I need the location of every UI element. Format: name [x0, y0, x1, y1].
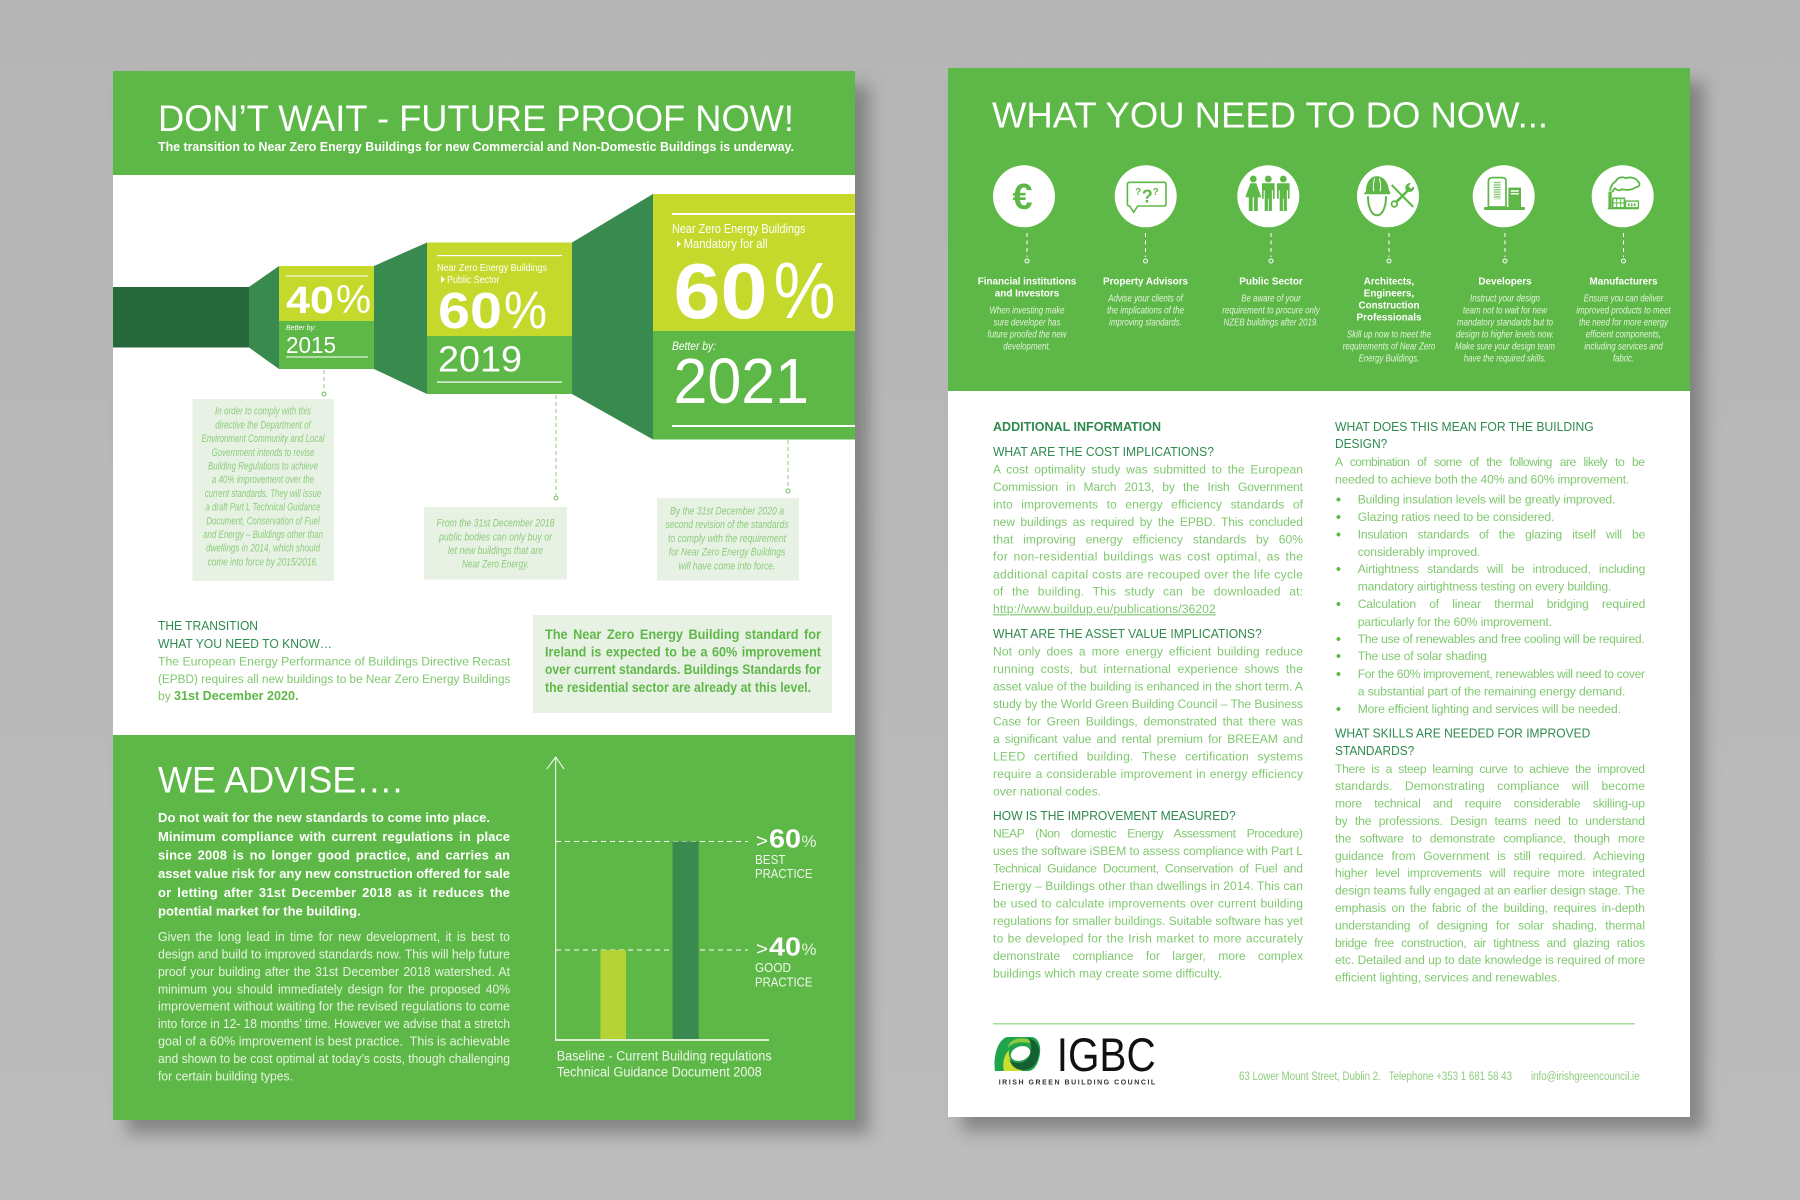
audience: public sector: NZEB buildings after 2019. [1224, 317, 1318, 329]
audience: architects and engineers: requirements of Near Zero [1343, 341, 1435, 353]
stage: 60% mandatory by 2021: Mandatory for all [684, 236, 768, 251]
section: skills: STANDARDS? [1335, 744, 1414, 758]
bullet list: mandatory airtightness testing on every building. [1358, 580, 1611, 594]
heading: we advise: WE ADVISE…. [158, 760, 402, 801]
audience: property advisors [1103, 165, 1188, 329]
section: asset value implications: study by the World Green Building Council – The Business [993, 697, 1303, 711]
section: cost implications: into improvements to energy efficiency standards of [993, 498, 1304, 512]
callout: 2015 note: Document, Conservation of Fuel [206, 515, 320, 527]
bullet list: • [1336, 526, 1341, 542]
stage: 60% mandatory by 2021: 2021 [674, 345, 809, 417]
label: best practice [755, 824, 816, 881]
callout: 2015 note: In order to comply with this [215, 406, 311, 418]
stage: 40% by 2015: Better by: [286, 323, 316, 332]
bullet list: The use of renewables and free cooling will be required. [1358, 632, 1645, 646]
icon: factory [1608, 177, 1639, 209]
section: cost implications: of the building. This study can be downloaded at: [993, 585, 1303, 599]
label: good practice: 40 [769, 932, 801, 962]
audience: manufacturers: the need for more energy [1579, 317, 1669, 329]
section: improvement measurement: buildings which may create some difficulty. [993, 966, 1222, 980]
label: best practice: % [802, 832, 816, 851]
section: cost implications: A cost optimality study was submitted to the European [993, 462, 1303, 476]
text block: bold advice: Do not wait for the new standards to come into place. [158, 810, 490, 825]
stage: 60% public sector by 2019: 60 [438, 282, 502, 339]
text block: the transition: (EPBD) requires all new buildings to be Near Zero Energy Buildings [158, 672, 510, 686]
callout: 2015 note: Government intends to revise [212, 447, 314, 459]
icon: hard hat and tools [1364, 176, 1414, 215]
audience: manufacturers: improved products to meet [1576, 305, 1672, 317]
icon: buildings [1484, 178, 1525, 210]
panel: we advise [113, 735, 855, 1120]
section: skills: design teams fully engaged at an earlier design stage. The [1335, 884, 1645, 898]
bullet list: Calculation of linear thermal bridging required [1358, 597, 1645, 611]
bullet list: Building insulation levels will be greatly improved. [1358, 492, 1615, 506]
audience: public sector: Public Sector [1239, 276, 1303, 287]
contact details: info@irishgreencouncil.ie [1531, 1071, 1640, 1083]
callout: 2021 note [657, 440, 799, 581]
bullet list: Glazing ratios need to be considered. [1358, 510, 1554, 524]
text column: design and skills [1335, 420, 1646, 985]
text block: the transition: by [158, 689, 172, 703]
axis caption: Baseline - Current Building regulations [557, 1049, 772, 1064]
funnel connector 3 [572, 194, 653, 440]
section: asset value implications [993, 627, 1304, 798]
bar chart: improvement vs baseline [547, 757, 816, 1080]
icon: speech bubble with question marks [1127, 182, 1166, 212]
text block: the transition: THE TRANSITION [158, 619, 258, 633]
audience: developers: team not to wait for new [1463, 305, 1548, 317]
bullet list: • [1336, 508, 1341, 524]
icon: euro: € [1012, 176, 1033, 217]
section: skills: efficient lighting, services and renewables. [1335, 971, 1560, 985]
logo: IGBC [994, 1029, 1156, 1087]
text block: the transition: 31st December 2020. [174, 689, 298, 703]
logo: IGBC: IGBC [1057, 1029, 1156, 1082]
funnel connector 2 [374, 242, 427, 394]
callout: 2015 note [192, 370, 334, 581]
funnel start band [113, 287, 249, 348]
audience: public sector: Be aware of your [1241, 293, 1301, 305]
label: best practice: PRACTICE [755, 867, 812, 881]
panel: right page [948, 68, 1690, 1117]
audience: architects and engineers: Skill up now to meet the [1347, 329, 1431, 341]
bullet list: The use of solar shading [1358, 649, 1487, 663]
title: DON’T WAIT - FUTURE PROOF NOW! [158, 98, 794, 139]
section: skills: more technical and require considerable skilling-up [1335, 797, 1645, 811]
label: good practice: % [802, 940, 816, 959]
bar: 40 percent [600, 950, 626, 1039]
callout: NZEB standard: the residential sector are already at this level. [545, 680, 811, 695]
audience: manufacturers: fabric. [1613, 353, 1634, 365]
callout: NZEB standard [533, 615, 832, 713]
text block: the transition [158, 619, 511, 703]
bullet list: • [1336, 630, 1341, 646]
callout: 2019 note: From the 31st December 2018 [436, 518, 555, 530]
bullet list: • [1336, 665, 1341, 681]
callout: 2015 note: come into force by 2015/2016. [208, 556, 318, 568]
audience: property advisors: the implications of the [1107, 305, 1184, 317]
section: skills: bridge free construction, air tightness and glazing ratios [1335, 936, 1645, 950]
section: skills: etc. Detailed and up to date knowledge is required of more [1335, 953, 1645, 967]
bullet list: • [1336, 648, 1341, 664]
audience: architects and engineers: Engineers, [1364, 288, 1414, 299]
callout: 2015 note: and Energy – Buildings other than [203, 529, 323, 541]
audience: public sector [1222, 165, 1320, 329]
section: improvement measurement: be used to calculate improvements over current building [993, 896, 1303, 910]
stage: 60% public sector by 2019: % [504, 281, 547, 340]
audience: manufacturers: including services and [1584, 341, 1664, 353]
section: asset value implications: a significant value and rental premium for BREEAM and [993, 732, 1303, 746]
icon: speech bubble with question marks: ? [1142, 186, 1153, 206]
bullet list: Airtightness standards will be introduced, including [1358, 562, 1645, 576]
text block: advice detail: Given the long lead in time for new development, it is best to [158, 929, 510, 944]
audience: developers [1455, 165, 1555, 365]
section: asset value implications: WHAT ARE THE ASSET VALUE IMPLICATIONS? [993, 627, 1262, 641]
stage: 60% mandatory by 2021: 60 [674, 247, 768, 335]
icon: logo rings [994, 1037, 1040, 1071]
section: asset value implications: require a considerable improvement in energy efficiency [993, 767, 1304, 781]
bullet list: More efficient lighting and services will be needed. [1358, 702, 1621, 716]
audience: architects and engineers: Architects, [1364, 276, 1414, 287]
audience: architects and engineers [1343, 165, 1435, 365]
callout: 2015 note: directive the Department of [215, 419, 311, 431]
bullet list: • [1336, 596, 1341, 612]
stage: 60% mandatory by 2021: Near Zero Energy Buildings [672, 221, 806, 236]
stage: 60% mandatory by 2021: Better by: [672, 341, 716, 353]
stage: 60% mandatory by 2021: % [774, 246, 836, 335]
callout: 2015 note: current standards. They will issue [205, 488, 321, 500]
section: asset value implications: Not only does a more energy efficient building reduce [993, 645, 1303, 659]
section: asset value implications: asset value of the building is enhanced in the short term. A [993, 680, 1304, 694]
audience: developers: design to higher levels now. [1456, 329, 1554, 341]
audience: financial institutions [978, 165, 1077, 353]
stage: 40% by 2015: 2015 [286, 332, 336, 358]
bullet list: Insulation standards of the glazing itself will be [1358, 528, 1646, 542]
section: improvement measurement: HOW IS THE IMPROVEMENT MEASURED? [993, 809, 1236, 823]
audience: architects and engineers: Construction [1358, 300, 1420, 311]
audience: developers: Developers [1478, 276, 1532, 287]
section: asset value implications: over national codes. [993, 784, 1101, 798]
audience: architects and engineers: Energy Buildings. [1359, 353, 1419, 365]
bullet list: • [1336, 700, 1341, 716]
heading: additional information: ADDITIONAL INFORMATION [993, 420, 1161, 434]
audience: manufacturers: Ensure you can deliver [1584, 293, 1664, 305]
stage: 60% mandatory by 2021 [653, 194, 855, 440]
axis caption [557, 1049, 772, 1080]
stage: 40% by 2015: 40 [286, 280, 334, 322]
stage: 60% public sector by 2019: 2019 [438, 338, 522, 380]
text block: bold advice: asset value risk for any new construction offered for sale [158, 866, 510, 881]
audience: manufacturers: efficient components, [1586, 329, 1661, 341]
section: improvement measurement: Technical Guidance Document, Conservation of Fuel and [993, 861, 1303, 875]
stage: 60% public sector by 2019: Near Zero Energy Buildings [437, 262, 547, 274]
label: best practice: > [756, 831, 768, 851]
audience: public sector: requirement to procure only [1222, 305, 1320, 317]
text block: bold advice: since 2008 is no longer good practice, and carries an [158, 847, 510, 862]
callout: NZEB standard: The Near Zero Energy Building standard for [545, 627, 822, 642]
section: improvement measurement: demonstrate compliance for larger, more complex [993, 949, 1303, 963]
section: improvement measurement: Energy – Buildings other than dwellings in 2014. This can [993, 879, 1303, 893]
audience: financial institutions: development. [1003, 341, 1051, 353]
axis caption: Technical Guidance Document 2008 [557, 1064, 762, 1080]
bullet list: particularly for the 60% improvement. [1358, 615, 1552, 629]
axis arrow [547, 757, 564, 1040]
audience: property advisors: Advise your clients of [1107, 293, 1184, 305]
section: skills [1335, 726, 1645, 985]
callout: 2015 note: dwellings in 2014, which should [206, 543, 321, 555]
text block: advice detail [158, 929, 510, 1083]
panel: right page header [948, 68, 1690, 391]
section: cost implications [993, 445, 1304, 616]
section: cost implications: that improving energy efficiency standards by 60% [993, 532, 1303, 546]
section: skills: understanding of designing for solar shading, thermal [1335, 918, 1645, 932]
text block: bold advice: Minimum compliance with current regulations in place [158, 829, 510, 844]
audience: manufacturers: Manufacturers [1590, 276, 1658, 287]
stage: 60% public sector by 2019: Public Sector [447, 274, 500, 286]
section: improvement measurement: regulations for smaller buildings. Suitable software has yet [993, 914, 1304, 928]
section: building design: WHAT DOES THIS MEAN FOR THE BUILDING [1335, 420, 1594, 434]
stage: 60% public sector by 2019 [427, 242, 572, 394]
section: building design: needed to achieve both the 40% and 60% improvement. [1335, 472, 1629, 486]
text block: bold advice [158, 810, 510, 918]
label: good practice: GOOD [755, 961, 791, 975]
text block: the transition: WHAT YOU NEED TO KNOW… [158, 637, 332, 651]
text block: advice detail: design and build to improved standards now. This will help future [158, 946, 510, 961]
label: good practice: PRACTICE [755, 976, 812, 990]
section: cost implications: Commission in March 2013, by the Irish Government [993, 480, 1304, 494]
text block: advice detail: proof your building after the 31st December 2018 watershed. At [158, 964, 510, 979]
section: cost implications: additional capital costs are recouped over the life cycle [993, 567, 1303, 581]
bullet list: • [1336, 560, 1341, 576]
text block: bold advice: or letting after 31st December 2018 as it reduces the [158, 885, 510, 900]
audience: property advisors: improving standards. [1109, 317, 1182, 329]
callout: NZEB standard: Ireland is expected to be a 60% improvement [545, 645, 821, 660]
logo: IGBC: IRISH GREEN BUILDING COUNCIL [999, 1080, 1156, 1087]
section: building design: A combination of some of the following are likely to be [1335, 455, 1645, 469]
section: cost implications: for non-residential buildings was cost optimal, as the [993, 550, 1303, 564]
section: improvement measurement [993, 809, 1304, 980]
section: skills: the software to demonstrate compliance, though more [1335, 831, 1645, 845]
audience: financial institutions: Financial institutions [978, 276, 1077, 287]
audience: property advisors: Property Advisors [1103, 276, 1188, 287]
label: best practice: 60 [769, 824, 801, 854]
text block: advice detail: and shown to be cost optimal at today’s costs, though challenging [158, 1051, 510, 1066]
icon: speech bubble with question marks: ? [1135, 187, 1141, 198]
section: asset value implications: LEED certified building. These certification systems [993, 750, 1303, 764]
audience: developers: have the required skills. [1464, 353, 1546, 365]
audience: financial institutions: future proofed the new [988, 329, 1068, 341]
section: improvement measurement: uses the software iSBEM to assess compliance with Part L [993, 844, 1303, 858]
callout: 2021 note: By the 31st December 2020 a [670, 506, 784, 518]
callout: NZEB standard: over current standards. Buildings Standards for [545, 662, 822, 677]
label: good practice [755, 932, 816, 990]
callout: 2015 note: Environment Community and Local [202, 433, 325, 445]
callout: 2015 note: a 40% improvement over the [212, 474, 314, 486]
footer [993, 1024, 1640, 1087]
text column: additional information [993, 420, 1304, 980]
section: cost implications: WHAT ARE THE COST IMPLICATIONS? [993, 445, 1214, 459]
bullet list: considerably improved. [1358, 545, 1480, 559]
callout: 2019 note: let new buildings that are [448, 545, 543, 557]
section: skills: higher level improvements will require more integrated [1335, 866, 1645, 880]
section: building design [1335, 420, 1645, 486]
callout: 2015 note: a draft Part L Technical Guidance [206, 502, 320, 514]
section: asset value implications: Case for Green Buildings, demonstrated that there was [993, 714, 1303, 728]
section: asset value implications: running costs, but international experience shows the [993, 662, 1303, 676]
callout: 2019 note [424, 395, 567, 580]
audience: architects and engineers: Professionals [1356, 312, 1422, 323]
callout: 2019 note: Near Zero Energy. [462, 559, 529, 571]
icon: people [1245, 176, 1290, 211]
text block: advice detail: goal of a 60% improvement is best practice. This is achievable [158, 1034, 510, 1049]
stage: 40% by 2015: % [336, 278, 371, 322]
funnel connector 1 [249, 266, 279, 369]
section: improvement measurement: NEAP (Non domestic Energy Assessment Procedure) [993, 826, 1303, 840]
text block: advice detail: for certain building types. [158, 1068, 293, 1083]
text block: bold advice: potential market for the building. [158, 904, 361, 918]
contact details: 63 Lower Mount Street, Dublin 2. Telephone +353 1 681 58 43 [1239, 1071, 1512, 1083]
callout: 2015 note: Building Regulations to achieve [208, 460, 318, 472]
panel: left page [113, 71, 855, 1120]
audience: developers: Make sure your design team [1455, 341, 1555, 353]
panel: left page header [113, 71, 855, 175]
section: building design: DESIGN? [1335, 437, 1387, 451]
audience: financial institutions: When investing make [990, 305, 1065, 317]
subtitle: The transition to Near Zero Energy Buildings for new Commercial and Non-Domestic Buildings is underway. [158, 139, 794, 154]
text block: the transition: The European Energy Performance of Buildings Directive Recast [158, 654, 511, 668]
section: skills: There is a steep learning curve to achieve the improved [1335, 762, 1645, 776]
stage: 40% by 2015 [279, 266, 374, 369]
callout: 2019 note: public bodies can only buy or [438, 531, 553, 543]
bar: 60 percent [673, 842, 699, 1039]
section: skills: WHAT SKILLS ARE NEEDED FOR IMPROVED [1335, 726, 1590, 740]
section: skills: by the professions. Design teams need to understand [1335, 814, 1645, 828]
section: cost implications: new buildings as required by the EPBD. This concluded [993, 515, 1303, 529]
callout: 2021 note: for Near Zero Energy Buildings [669, 547, 786, 559]
callout: 2021 note: second revision of the standards [666, 519, 789, 531]
bullet list: • [1336, 491, 1341, 507]
title: WHAT YOU NEED TO DO NOW... [992, 95, 1548, 136]
label: good practice: > [756, 939, 768, 959]
text block: advice detail: into force in 12- 18 months’ time. However we advise that a stretch [158, 1016, 510, 1031]
bullet list [1336, 491, 1646, 716]
section: cost implications: http://www.buildup.eu/publications/36202 [993, 602, 1216, 616]
section: skills: emphasis on the fabric of the building, requires in-depth [1335, 901, 1645, 915]
callout: 2021 note: will have come into force. [678, 560, 776, 572]
callout: 2021 note: to comply with the requirement [668, 533, 787, 545]
text block: advice detail: minimum you should immediately design for the proposed 40% [158, 981, 510, 996]
icon: speech bubble with question marks: ? [1153, 187, 1159, 198]
timeline funnel chart [113, 194, 855, 440]
text block: advice detail: improvement without waiting for the revised regulations to come [158, 999, 510, 1014]
audience: financial institutions: and Investors [995, 288, 1060, 299]
section: skills: standards. Demonstrating compliance will become [1335, 779, 1645, 793]
label: best practice: BEST [755, 853, 786, 867]
audience: developers: mandatory standards but to [1457, 317, 1553, 329]
bullet list: a substantial part of the remaining energy demand. [1358, 684, 1625, 698]
section: skills: guidance from Government is still required. Achieving [1335, 849, 1645, 863]
audience: manufacturers [1576, 165, 1672, 365]
bullet list: For the 60% improvement, renewables will need to cover [1358, 667, 1645, 681]
section: improvement measurement: to be developed for the Irish market to more accurately [993, 931, 1304, 945]
audience: financial institutions: sure developer has [994, 317, 1061, 329]
audience: developers: Instruct your design [1470, 293, 1540, 305]
